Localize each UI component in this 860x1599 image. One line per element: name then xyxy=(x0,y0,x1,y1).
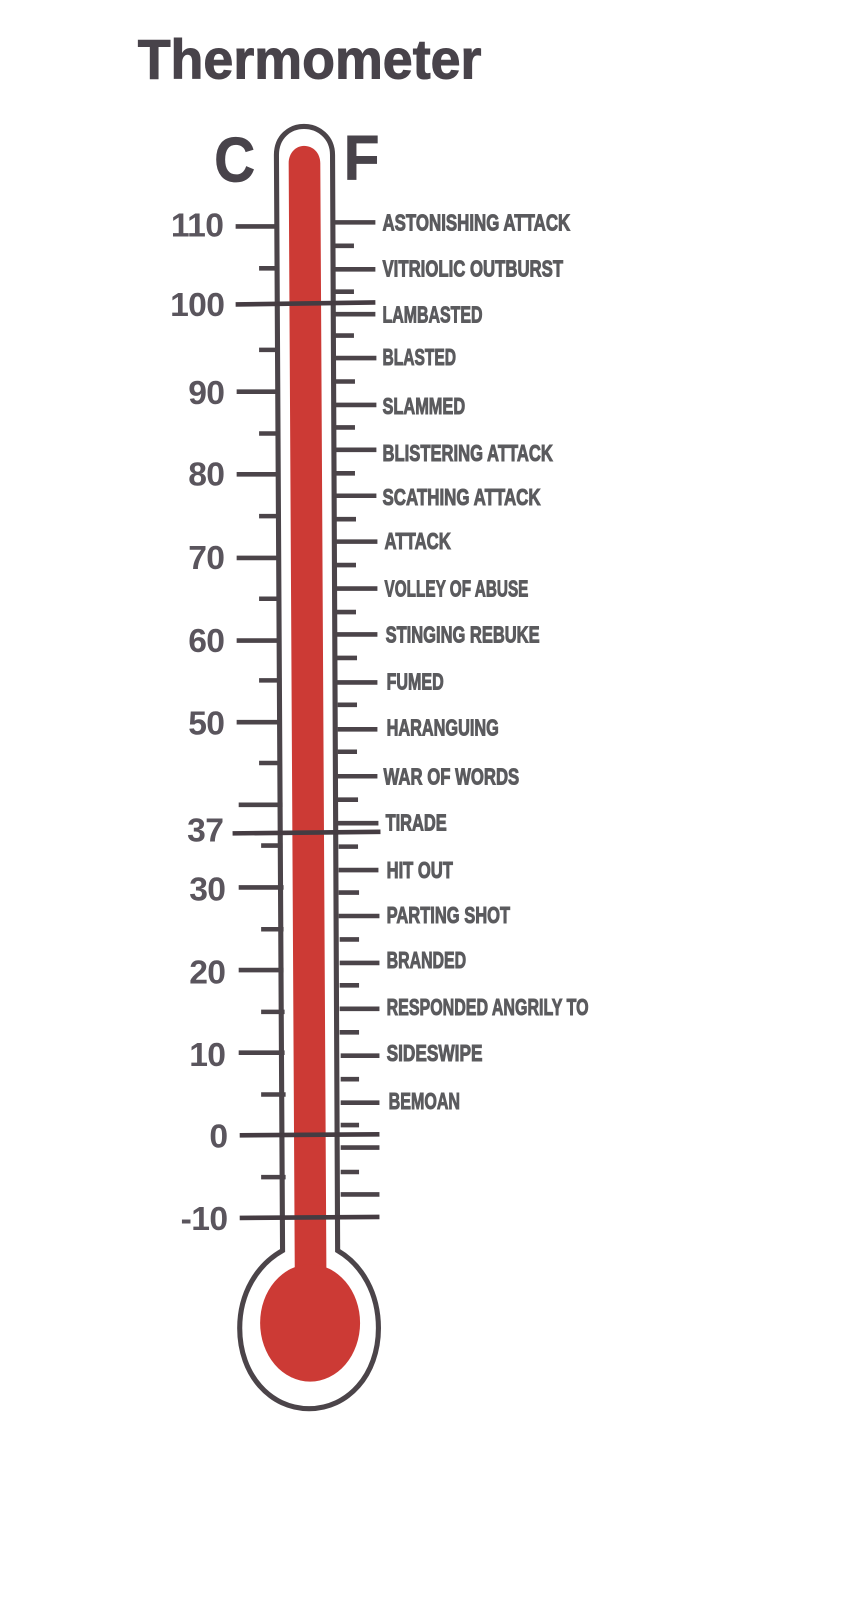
Fahrenheit word labels: HIT OUT xyxy=(387,857,453,883)
heading: Fahrenheit: F xyxy=(344,124,379,194)
Celsius numbers: 110 xyxy=(171,208,223,245)
Fahrenheit word labels: ASTONISHING ATTACK xyxy=(383,210,570,236)
Fahrenheit word labels: BLASTED xyxy=(383,344,456,370)
Fahrenheit word labels: RESPONDED ANGRILY TO xyxy=(387,994,589,1020)
Celsius numbers: 30 xyxy=(189,872,225,909)
Fahrenheit word labels: TIRADE xyxy=(386,809,447,835)
Fahrenheit word labels: BRANDED xyxy=(387,947,466,973)
Fahrenheit word labels xyxy=(383,210,589,1114)
Fahrenheit word labels: PARTING SHOT xyxy=(387,902,510,928)
Celsius numbers: 60 xyxy=(188,623,224,660)
Fahrenheit word labels: FUMED xyxy=(387,669,444,695)
long reference lines: 100, 37, 0 and -10 xyxy=(233,302,380,1218)
Celsius numbers: -10 xyxy=(181,1201,227,1238)
Fahrenheit word labels: WAR OF WORDS xyxy=(384,763,519,789)
Celsius numbers: 37 xyxy=(187,813,223,850)
Celsius numbers: 80 xyxy=(188,457,224,494)
Fahrenheit word labels: VOLLEY OF ABUSE xyxy=(385,576,528,602)
Celsius numbers: 20 xyxy=(189,954,225,991)
Fahrenheit word labels: SCATHING ATTACK xyxy=(383,484,541,510)
Celsius numbers: 70 xyxy=(188,540,224,577)
Fahrenheit word labels: SLAMMED xyxy=(383,393,465,419)
Celsius numbers: 50 xyxy=(188,705,224,742)
Fahrenheit word labels: STINGING REBUKE xyxy=(386,622,540,648)
heading: Celsius: C xyxy=(214,126,255,196)
Celsius scale ticks xyxy=(236,226,286,1177)
title: Thermometer xyxy=(138,28,481,91)
Fahrenheit word labels: SIDESWIPE xyxy=(387,1040,482,1066)
Fahrenheit scale ticks xyxy=(334,222,379,1194)
Fahrenheit word labels: ATTACK xyxy=(385,528,451,554)
Fahrenheit word labels: BLISTERING ATTACK xyxy=(383,440,553,466)
Celsius numbers: 100 xyxy=(170,287,224,324)
Fahrenheit word labels: BEMOAN xyxy=(389,1088,460,1114)
Celsius numbers xyxy=(170,208,227,1238)
Fahrenheit word labels: VITRIOLIC OUTBURST xyxy=(383,255,564,281)
Fahrenheit word labels: LAMBASTED xyxy=(383,301,482,327)
red mercury column and bulb xyxy=(260,146,360,1382)
thermometer glass outline xyxy=(240,126,378,1409)
Celsius numbers: 10 xyxy=(189,1037,225,1074)
Celsius numbers: 0 xyxy=(209,1119,227,1156)
Celsius numbers: 90 xyxy=(188,375,224,412)
Fahrenheit word labels: HARANGUING xyxy=(387,714,499,740)
